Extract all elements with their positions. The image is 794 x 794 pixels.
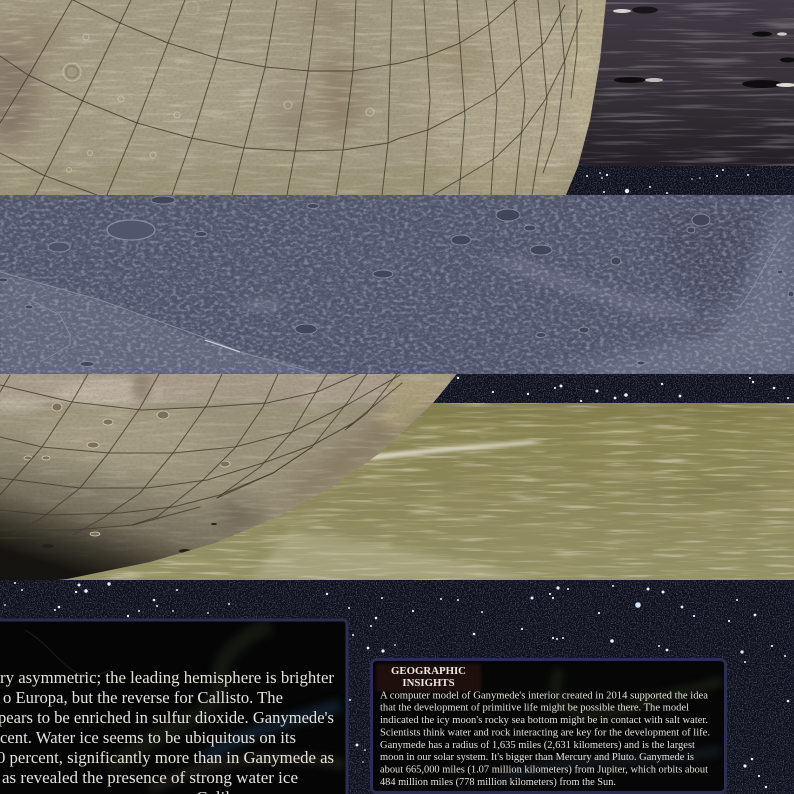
bright surface streak: [360, 441, 545, 460]
craters on upper globe: [63, 1, 374, 172]
heading: INSIGHTS: [402, 677, 455, 689]
panel body text: that the development of primitive life might be possible there. The model: [380, 702, 689, 714]
panel body text: 0 percent, significantly more than in Ganymede as: [0, 748, 334, 767]
Ganymede globe, lower slice: [0, 370, 470, 590]
craters on lower globe: [24, 403, 230, 536]
star band near top: [586, 169, 749, 194]
band tonal regions: [0, 195, 794, 380]
olive icy surface panel: [60, 403, 794, 580]
panel body text: Scientists think water and rock interacting are key for the development of life.: [380, 728, 710, 738]
grey-blue cratered surface band: [0, 195, 794, 380]
panel body text: as revealed the presence of strong water ice: [2, 768, 298, 787]
text panel: geographic insights: [372, 660, 726, 792]
stars in lower field: [4, 582, 789, 788]
globe surface mottling: [0, 0, 612, 195]
panel body text: moon in our solar system. It's bigger than Mercury and Pluto. Ganymede is: [380, 752, 694, 763]
panel nebula wisps: [376, 664, 722, 780]
panel body text: Ganymede has a radius of 1,635 miles (2,631 kilometers) and is the largest: [380, 740, 695, 751]
panel body text: ry asymmetric; the leading hemisphere is brighter: [0, 668, 334, 687]
dark rocky surface panel: [560, 0, 794, 166]
lower globe mottling: [0, 374, 452, 528]
bright stars: [4, 169, 789, 788]
text panel: surface description: [0, 620, 347, 794]
heading: GEOGRAPHIC: [391, 665, 466, 677]
panel body text: 484 million miles (778 million kilometers) from the Sun.: [380, 777, 616, 788]
band craters: [0, 196, 794, 366]
panel body text: pears to be enriched in sulfur dioxide. Ganymede's: [0, 708, 334, 727]
panel body text: [380, 690, 710, 788]
heading: [391, 665, 466, 689]
panel nebula wisps: [25, 625, 345, 790]
panel body text: [0, 668, 334, 794]
graticule lines on lower globe: [0, 374, 402, 538]
panel body text: cent. Water ice seems to be ubiquitous on its: [0, 728, 296, 747]
dark pits near terminator: [42, 523, 217, 553]
star band in middle: [457, 377, 789, 402]
translucent overlay band: [0, 166, 610, 195]
ridge lines on band: [0, 240, 780, 374]
panel body text: indicated the icy moon's rocky sea bottom might be in contact with salt water.: [380, 715, 708, 726]
dark surface craters: [613, 6, 794, 88]
panel body text: o Europa, but the reverse for Callisto. The: [3, 688, 283, 707]
Ganymede globe, upper slice: [0, 0, 612, 195]
panel body text: about 665,000 miles (1.07 million kilometers) from Jupiter, which orbits about: [380, 764, 708, 776]
graticule lines on upper globe: [0, 0, 582, 195]
panel body text: A computer model of Ganymede's interior created in 2014 supported the idea: [380, 690, 708, 702]
